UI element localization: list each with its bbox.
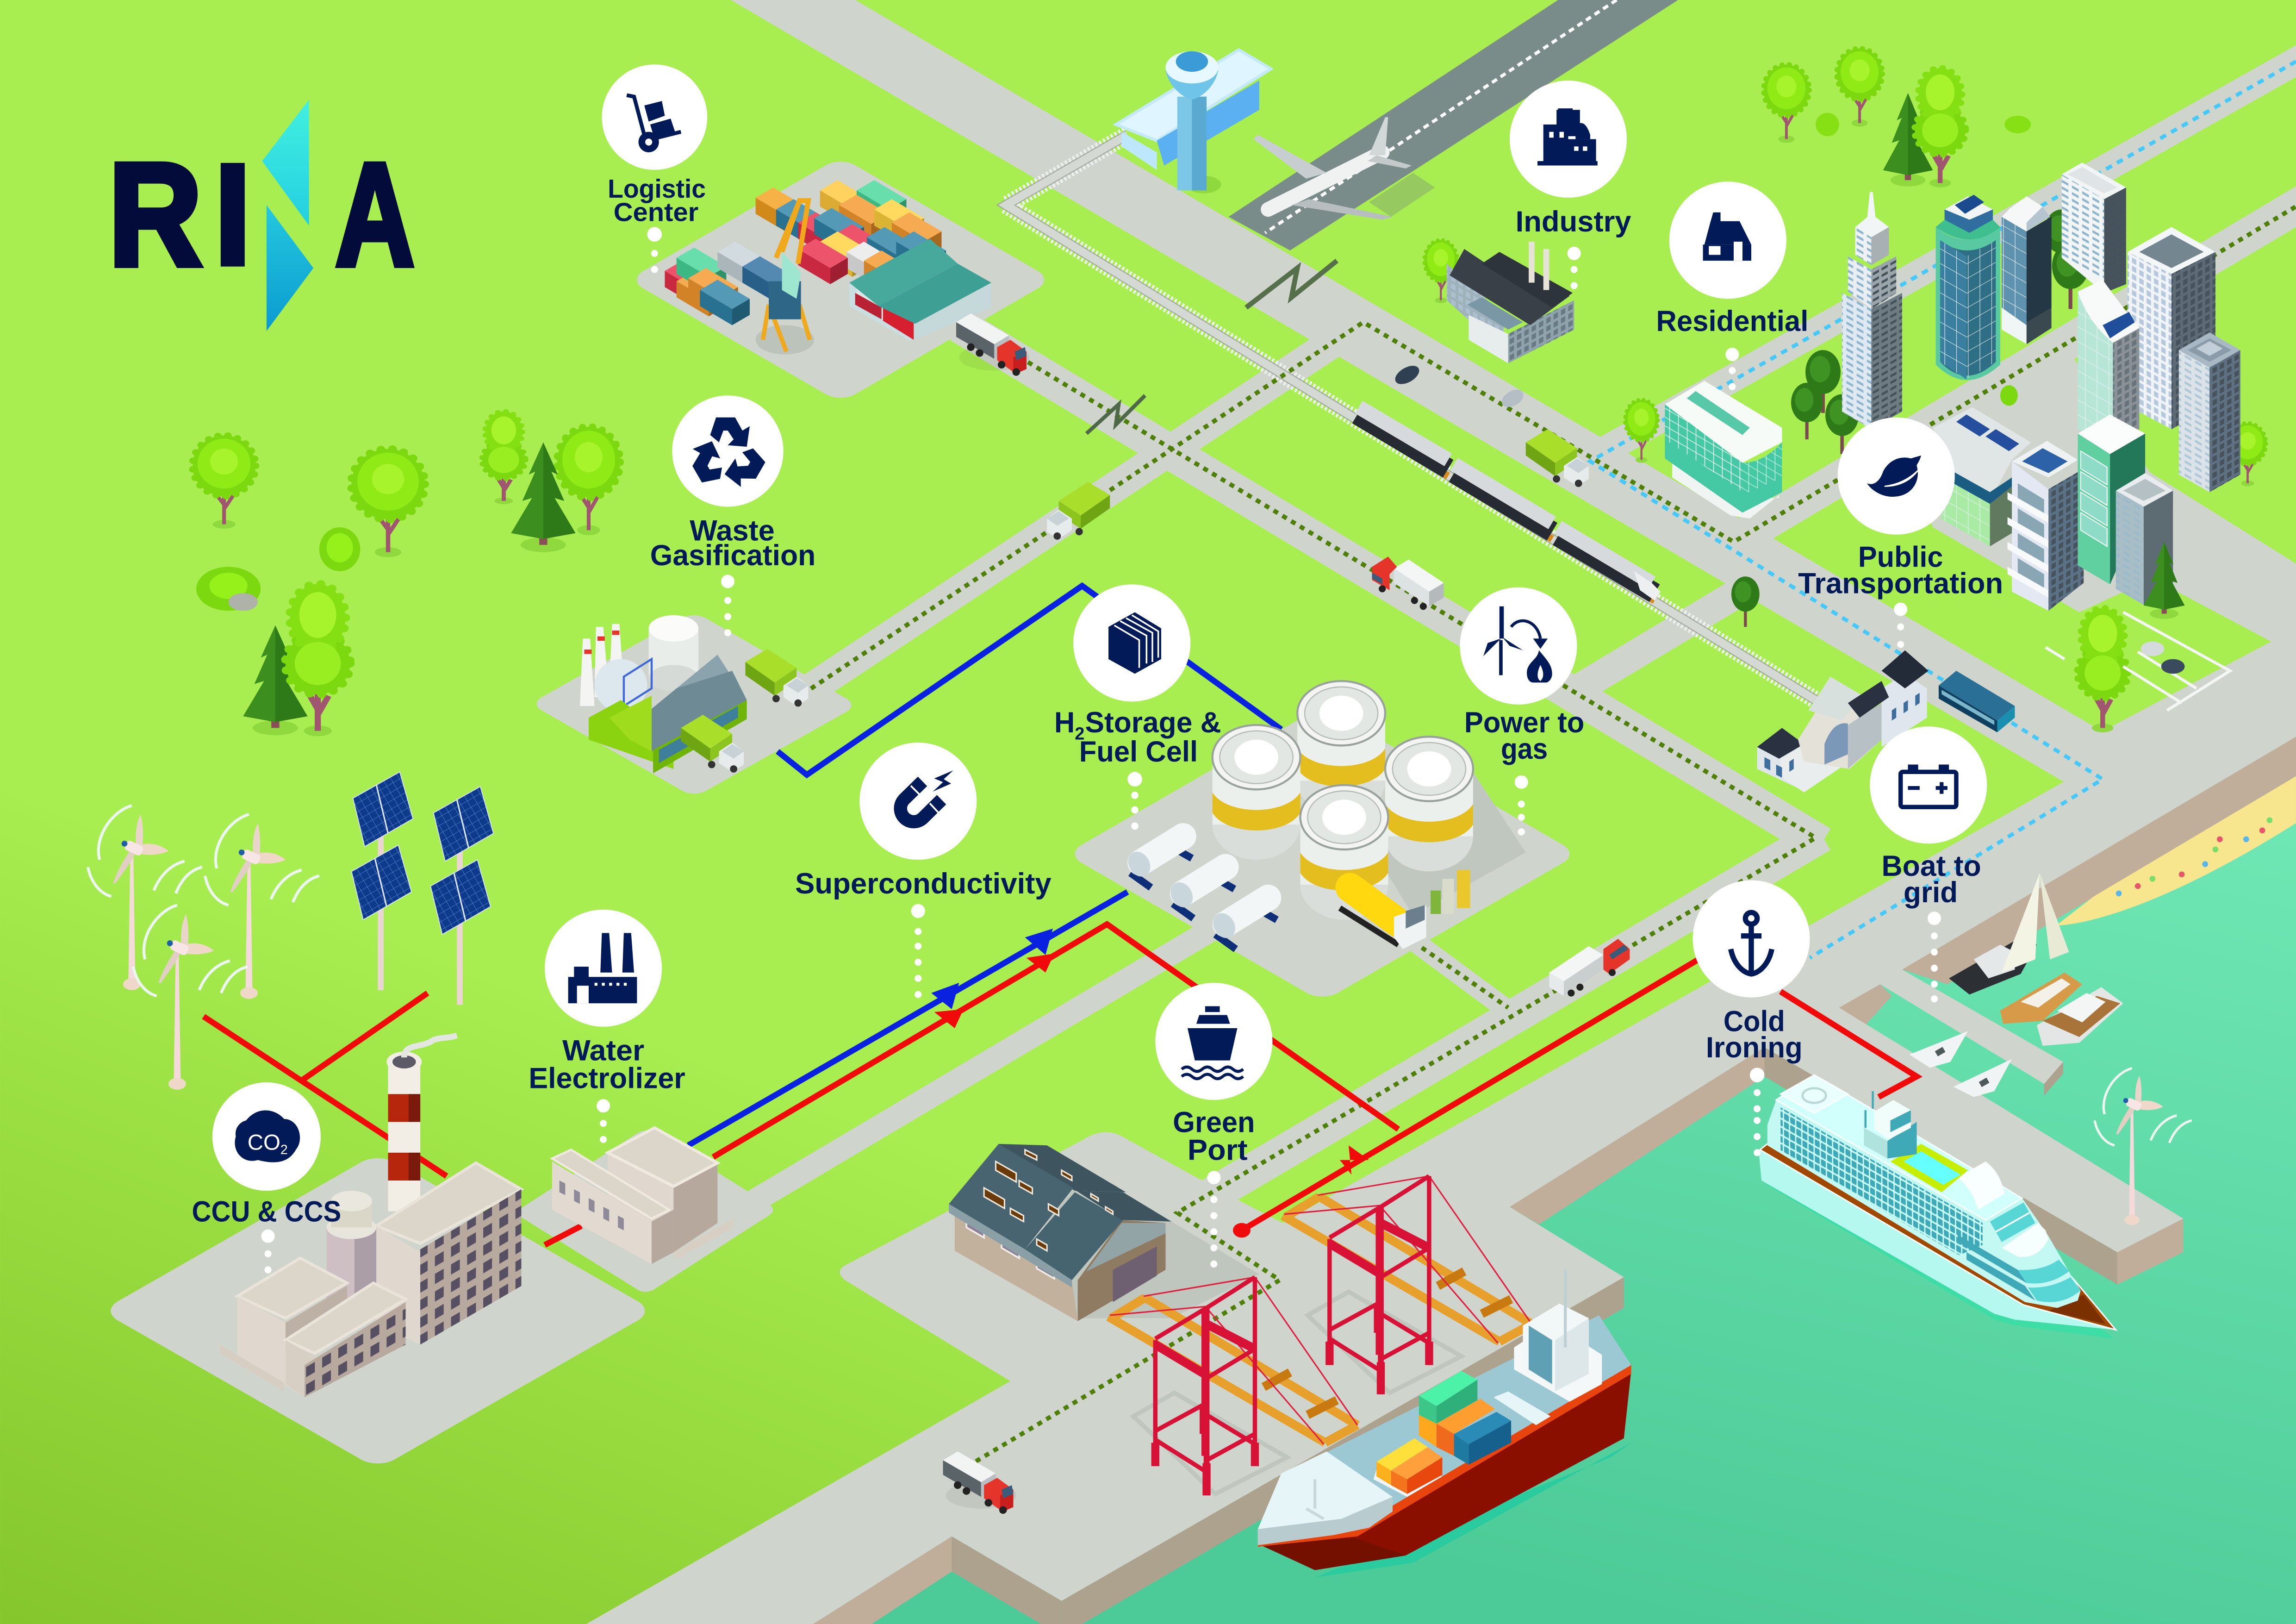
node: ccu and ccs xyxy=(192,1082,341,1274)
label: cold ironing: Ironing xyxy=(1706,1031,1803,1064)
icon: storage stack xyxy=(1108,612,1161,674)
residential building xyxy=(1665,381,1782,518)
icon: co2 cloud xyxy=(235,1111,300,1162)
label: water electrolizer xyxy=(529,1035,685,1095)
railway xyxy=(1006,135,1816,700)
node: public transportation xyxy=(1798,418,2003,648)
truck: port xyxy=(943,1451,1016,1514)
building: silver block xyxy=(2179,332,2240,492)
water xyxy=(703,703,2296,1624)
panel: hydrogen ground xyxy=(1066,706,1579,1002)
building: green tower xyxy=(2078,414,2145,584)
connector dots xyxy=(261,1230,275,1274)
label: ccu and ccs: CCU & CCS xyxy=(192,1196,341,1228)
parking lot xyxy=(2046,612,2230,710)
label: power to gas: Power to xyxy=(1464,706,1584,739)
line arrows and node xyxy=(931,929,1369,1237)
logistic center warehouse xyxy=(849,239,991,341)
waste gasification plant xyxy=(580,615,747,773)
label: boat to grid: Boat to xyxy=(1882,850,1981,882)
icon: turbine and flame xyxy=(1483,606,1552,682)
wind turbines xyxy=(88,806,319,1090)
icon: hand truck xyxy=(627,95,681,152)
connector dots xyxy=(721,575,734,636)
trees: top right grove xyxy=(1425,49,2266,627)
node: waste gasification xyxy=(650,395,815,636)
port warehouse xyxy=(949,1144,1259,1321)
shadow tiles: hydrogen xyxy=(1355,759,1526,915)
icon: recycle arrows xyxy=(685,418,768,491)
tanker truck and pumps xyxy=(1340,870,1470,949)
label: logistic center xyxy=(608,174,706,227)
building: tall grey block xyxy=(2128,227,2215,429)
label: superconductivity: Superconductivity xyxy=(795,868,1052,900)
label: waste gasification: Gasification xyxy=(650,539,815,572)
label: cold ironing xyxy=(1706,1005,1803,1064)
building: spire tower xyxy=(1842,192,1902,429)
logo: RINA: I xyxy=(212,133,253,297)
truck: logistic xyxy=(956,313,1029,376)
label: hydrogen storage and fuel cell: H xyxy=(1054,706,1075,739)
airport terminal and tower xyxy=(1116,50,1271,194)
railway station xyxy=(1757,650,1929,793)
node: hydrogen storage and fuel cell xyxy=(1054,584,1221,830)
logo: RINA xyxy=(108,100,414,331)
node: industry xyxy=(1510,81,1631,289)
icon: magnet xyxy=(901,770,953,822)
front trees xyxy=(2078,542,2184,732)
ship superstructure xyxy=(1514,1270,1602,1402)
label: logistic center: Center xyxy=(614,198,698,227)
dashed light blue grid lines xyxy=(1590,62,2296,958)
connector dots xyxy=(911,904,925,998)
trees: left grove xyxy=(193,412,620,736)
cars on road xyxy=(1392,362,1526,411)
icon: industrial buildings xyxy=(1537,108,1598,166)
label: waste gasification xyxy=(650,514,815,572)
label: boat to grid: grid xyxy=(1904,876,1958,909)
building: teal round tower xyxy=(1936,195,2000,380)
connector dots xyxy=(1127,772,1142,830)
label: public transportation: Transportation xyxy=(1798,567,2003,600)
connector dots xyxy=(1725,348,1739,390)
label: green port: Green xyxy=(1173,1106,1255,1139)
connector dots xyxy=(647,227,662,273)
train xyxy=(1357,407,1661,600)
label: hydrogen storage and fuel cell: Storage & xyxy=(1085,706,1221,739)
icon: ship on waves xyxy=(1182,1006,1243,1079)
label: green port xyxy=(1173,1106,1255,1167)
quay walls xyxy=(813,737,2296,1624)
building: white tower back right xyxy=(2062,162,2126,293)
node: water electrolizer xyxy=(529,910,685,1143)
building: apartment block xyxy=(2008,441,2084,611)
city skyline xyxy=(1842,162,2240,611)
solar panels xyxy=(351,772,493,1005)
connector dots xyxy=(1894,603,1907,648)
label: water electrolizer: Electrolizer xyxy=(529,1062,685,1095)
panel: logistic center ground xyxy=(628,157,1053,403)
chimney xyxy=(386,1036,457,1211)
cargo ship xyxy=(1258,1270,1631,1577)
icon: anchor xyxy=(1731,912,1772,974)
pier wind turbine xyxy=(2095,1068,2192,1225)
node: superconductivity xyxy=(795,743,1052,998)
icon: leaf xyxy=(1867,456,1921,497)
industry factory xyxy=(1447,242,1574,363)
building: dark small tower xyxy=(2002,196,2052,344)
ship containers xyxy=(1376,1371,1511,1494)
building: glass tower xyxy=(2078,280,2139,441)
logistic center containers xyxy=(665,180,946,325)
connector dots xyxy=(1928,912,1941,1002)
building: grey front tower xyxy=(2116,473,2173,605)
label: residential: Residential xyxy=(1656,305,1808,337)
water electrolyzer building xyxy=(552,1128,734,1264)
label: cold ironing: Cold xyxy=(1724,1005,1785,1037)
node: green port xyxy=(1155,983,1272,1268)
node: cold ironing xyxy=(1692,880,1810,1156)
label: public transportation: Public xyxy=(1858,541,1943,573)
label: water electrolizer: Water xyxy=(562,1035,644,1067)
icon: co2 cloud: 2 xyxy=(280,1143,288,1157)
beach xyxy=(2056,776,2296,926)
node: power to gas xyxy=(1460,587,1584,836)
node: logistic center xyxy=(602,64,707,273)
city ground xyxy=(1904,344,2296,642)
dotted route lines xyxy=(803,206,2296,1462)
airplane xyxy=(1253,117,1435,220)
truck: coast road, heading up-right xyxy=(1549,939,1630,997)
connector dots xyxy=(597,1099,610,1143)
label: boat to grid xyxy=(1882,850,1981,909)
label: power to gas: gas xyxy=(1501,733,1548,765)
label: hydrogen storage and fuel cell: 2 xyxy=(1075,725,1084,744)
runway xyxy=(1229,0,1678,250)
truck: road, heading up-left xyxy=(1372,556,1444,610)
panel: electrolyzer ground xyxy=(514,1128,778,1295)
label: waste gasification: Waste xyxy=(690,514,775,547)
label: hydrogen storage and fuel cell: Fuel Cell xyxy=(1079,736,1198,768)
icon: co2 cloud: CO xyxy=(248,1131,280,1155)
hydrogen tanks xyxy=(1213,681,1473,920)
label: hydrogen storage and fuel cell xyxy=(1054,706,1221,768)
bus xyxy=(1939,671,2015,732)
label: industry: Industry xyxy=(1516,206,1631,238)
truck: green garbage lorries xyxy=(681,429,1589,773)
label: green port: Port xyxy=(1188,1134,1248,1167)
connector dots xyxy=(1568,247,1581,289)
icon: battery xyxy=(1901,764,1956,807)
blue energy lines xyxy=(688,586,1281,1145)
red energy lines xyxy=(204,924,1916,1245)
connector dots xyxy=(1515,775,1528,836)
label: public transportation xyxy=(1798,541,2003,600)
panel: waste ground xyxy=(530,612,858,798)
logistic center crane xyxy=(756,200,814,355)
node: boat to grid xyxy=(1870,726,1987,1002)
horizontal bullet tanks xyxy=(1124,837,1277,949)
lightning crossing symbols xyxy=(1087,261,1337,433)
logo: RINA: A xyxy=(336,133,414,297)
logo: RINA: R xyxy=(108,133,202,297)
panel: ccu ground xyxy=(101,1153,654,1469)
label: power to gas xyxy=(1464,706,1584,765)
quay and port ground xyxy=(586,625,2296,1624)
connector dots xyxy=(1750,1068,1764,1156)
label: logistic center: Logistic xyxy=(608,174,706,204)
icon: house xyxy=(1703,212,1751,261)
icon: electrolyzer plant xyxy=(568,933,637,1003)
port cranes xyxy=(1108,1176,1531,1495)
road network xyxy=(688,0,2296,1218)
cruise ship xyxy=(1759,1075,2116,1339)
marina boats xyxy=(1910,873,2123,1097)
ccu plant xyxy=(220,1163,521,1397)
node: residential xyxy=(1656,181,1808,390)
connector dots xyxy=(1207,1171,1220,1268)
building: solar flat block xyxy=(1933,407,2031,546)
